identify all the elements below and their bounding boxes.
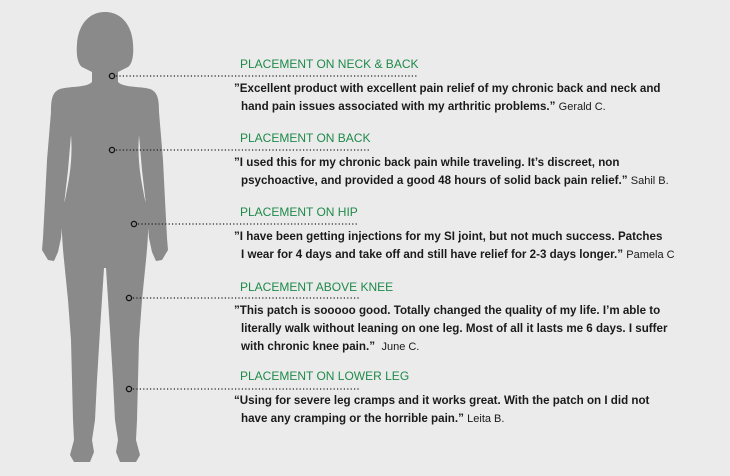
heading: back: PLACEMENT ON BACK [240, 131, 370, 145]
quote: June [234, 304, 668, 353]
quote: Gerald: ”Excellent product with excellent pain relief of my chronic back and neck and [234, 82, 661, 95]
quote: Leita: have any cramping or the horrible pain.” Leita B. [241, 412, 504, 425]
quote: Pamela [234, 230, 675, 261]
quote: June: literally walk without leaning on one leg. Most of all it lasts me 6 days. I suffer [241, 322, 667, 335]
quote: Pamela: I wear for 4 days and take off and still have relief for 2-3 days longer.” Pamela C [241, 248, 675, 261]
heading: above knee: PLACEMENT ABOVE KNEE [240, 280, 393, 294]
quote: Sahil: ”I used this for my chronic back pain while traveling. It’s discreet, non [234, 156, 619, 169]
heading: hip: PLACEMENT ON HIP [240, 205, 358, 219]
heading: lower leg: PLACEMENT ON LOWER LEG [240, 369, 409, 383]
quote: Sahil [234, 156, 669, 187]
quote: Gerald [234, 82, 661, 113]
quote: Gerald: hand pain issues associated with my arthritic problems.” Gerald C. [241, 100, 606, 113]
quote: Leita [234, 394, 650, 425]
quote: Leita: “Using for severe leg cramps and it works great. With the patch on I did not [234, 394, 649, 407]
quote: Pamela: ”I have been getting injections for my SI joint, but not much success. Patches [234, 230, 662, 243]
markers and dotted leaders [109, 73, 137, 392]
silhouette [42, 12, 168, 462]
quote: Sahil: psychoactive, and provided a good 48 hours of solid back pain relief.” Sahil B. [241, 174, 669, 187]
quote: June: ”This patch is sooooo good. Totally changed the quality of my life. I’m able to [234, 304, 660, 317]
quote: June: with chronic knee pain.” June C. [241, 340, 419, 353]
heading: neck & back: PLACEMENT ON NECK & BACK [240, 57, 418, 71]
